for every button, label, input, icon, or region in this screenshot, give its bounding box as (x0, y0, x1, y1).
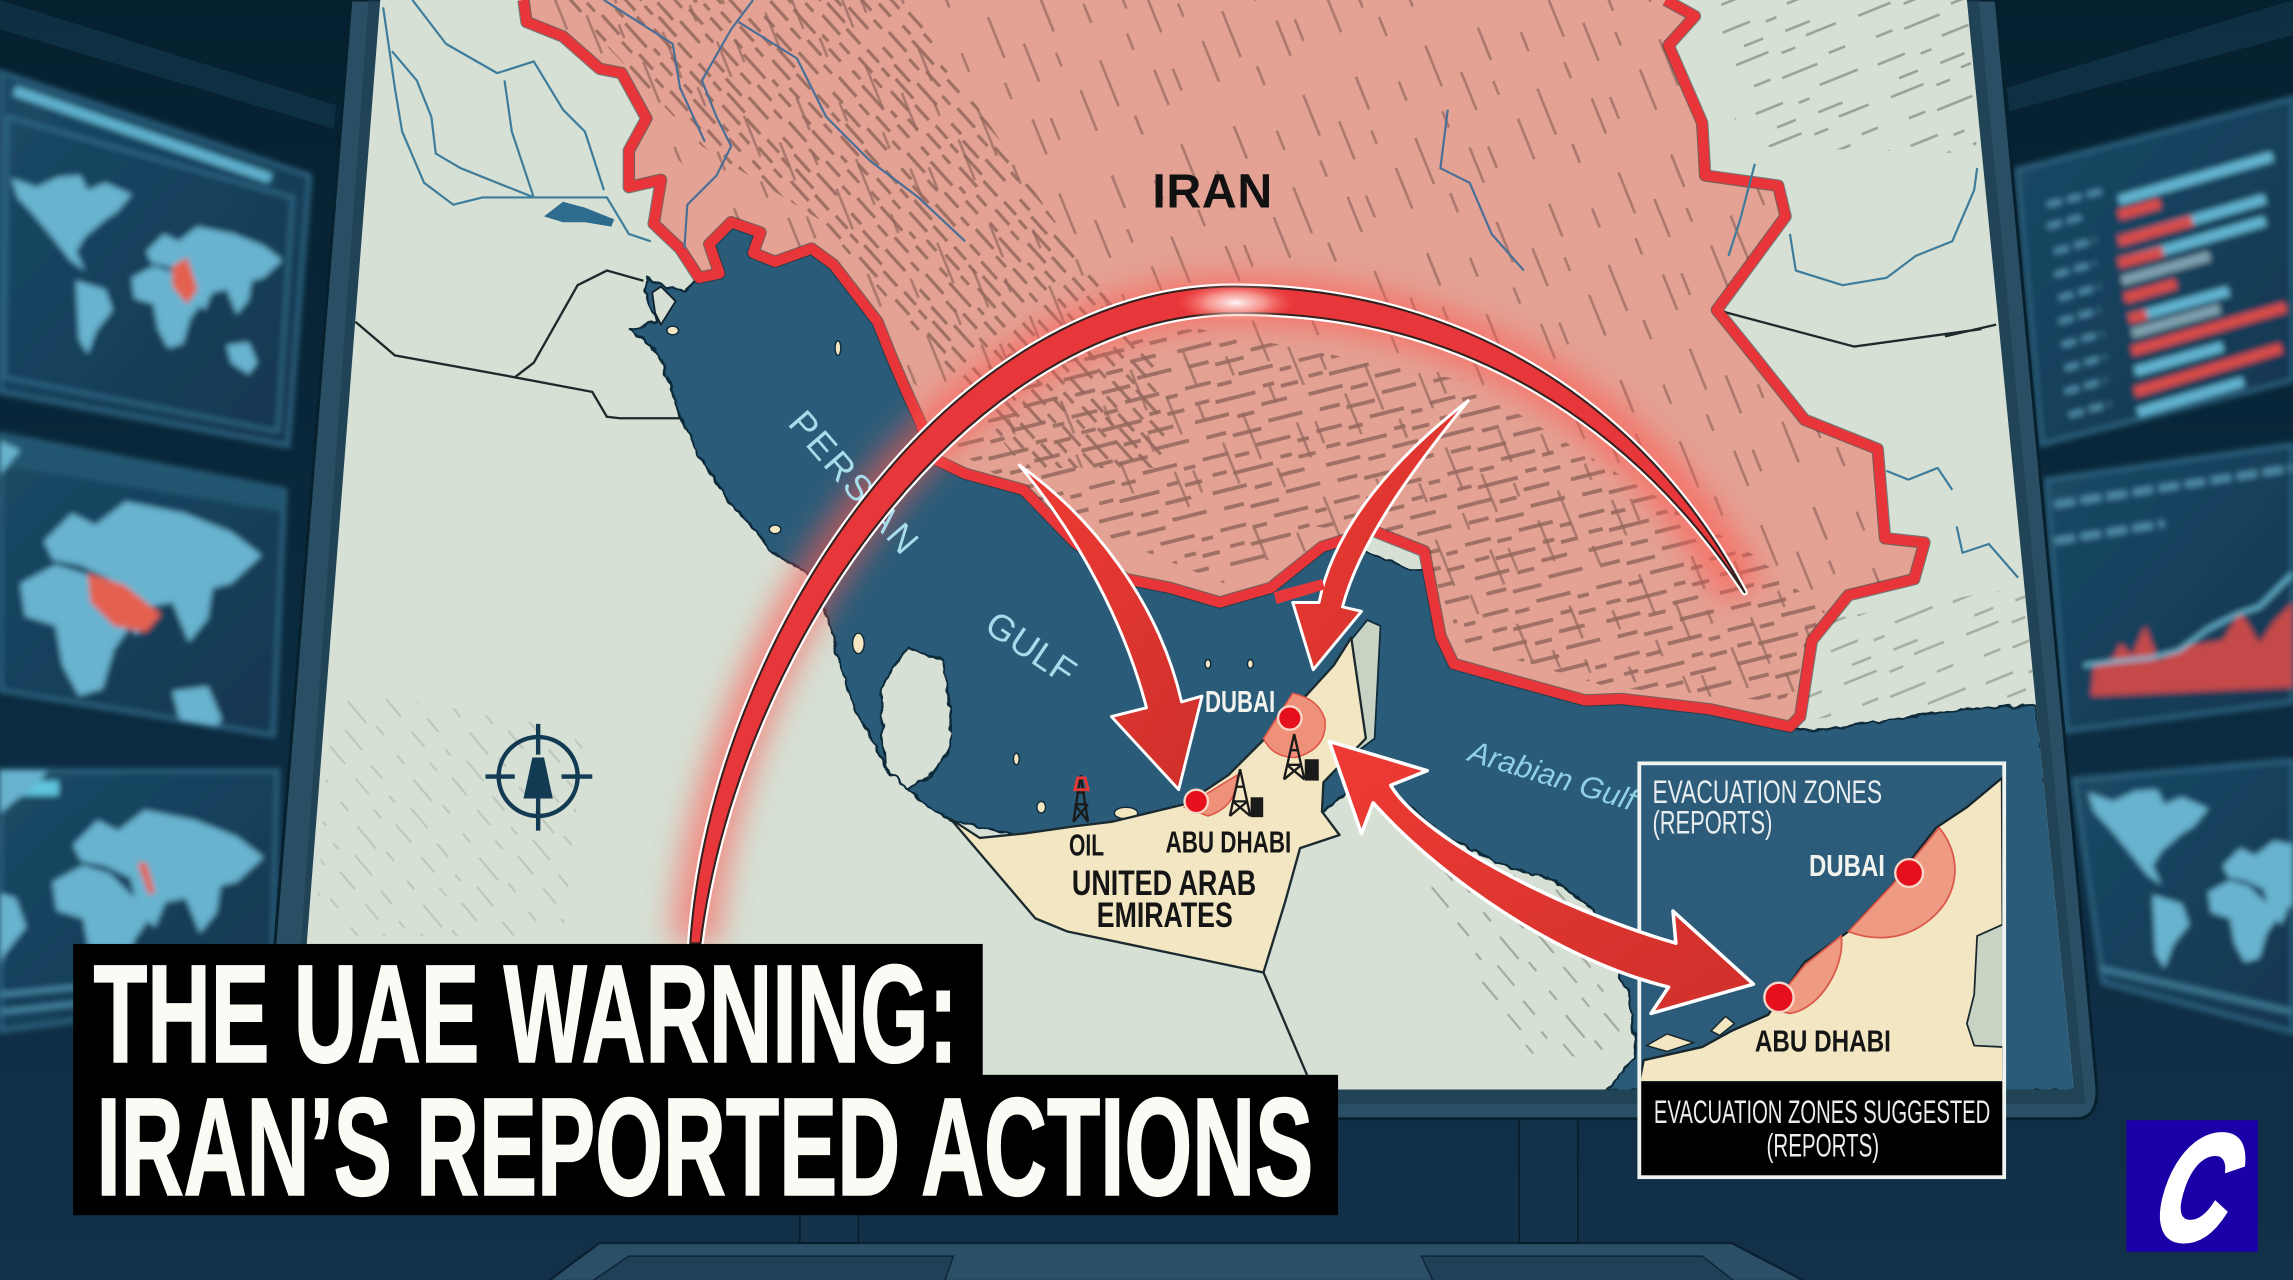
land: Qatar (880, 648, 951, 788)
inset caption: (REPORTS) (1767, 1128, 1879, 1164)
Iran border (524, 0, 1924, 727)
inset caption (1639, 1082, 2004, 1177)
label: Oil: OIL (1069, 827, 1104, 862)
icon: oil rig Dubai (1284, 734, 1318, 779)
terrain hatching: side land (314, 0, 2036, 1060)
lake (544, 202, 614, 227)
inset land (1639, 778, 2003, 1082)
icon: oil rig Abu Dhabi (1230, 769, 1262, 816)
icon: oil rig red (1073, 775, 1088, 822)
label: Iran: IRAN (1152, 165, 1272, 219)
label: United Arab Emirates: UNITED ARAB (1072, 864, 1256, 903)
right monitors (2017, 98, 2293, 1032)
inset evacuation zone: Abu Dhabi (1769, 936, 1842, 1013)
inset gray inland patch (1967, 924, 2003, 1047)
inset heading (1652, 774, 1882, 841)
Dubai evacuation zone (1263, 693, 1325, 758)
label: United Arab Emirates (1072, 864, 1256, 935)
upper wall bands (0, 0, 2293, 129)
inset evacuation zone: Dubai (1848, 828, 1955, 938)
double-headed arrow to inset (1329, 741, 1753, 1013)
small arrow stub (1274, 579, 1325, 604)
strike arrow from north-west (1019, 465, 1202, 790)
title line one: THE UAE WARNING: (94, 937, 958, 1092)
monitor: lower left world map (0, 738, 278, 1031)
attack arc (690, 287, 1745, 943)
title line two: IRAN’S REPORTED ACTIONS (97, 1070, 1313, 1225)
attack arc glow (695, 300, 1743, 943)
marker: Abu Dhabi (1185, 790, 1208, 813)
title box line two (73, 1075, 1338, 1215)
label: Dubai: DUBAI (1205, 684, 1275, 719)
terrain hatching: Iran (524, 0, 1901, 717)
label: Abu Dhabi: ABU DHABI (1166, 825, 1291, 860)
desk console (548, 1243, 1805, 1280)
marker: Dubai (1278, 706, 1302, 730)
arc flare (1177, 282, 1294, 323)
label: United Arab Emirates: EMIRATES (1097, 896, 1233, 935)
borders (355, 271, 1996, 1091)
left monitors (0, 72, 310, 1031)
land base (278, 0, 2091, 1097)
rivers (383, 0, 2018, 578)
land: Kuwait inlet (652, 287, 676, 325)
Abu Dhabi evacuation zone (1185, 775, 1237, 816)
label: Arabian Gulf: Arabian Gulf (1463, 733, 1643, 819)
inset marker: Abu Dhabi (1764, 983, 1794, 1012)
main display bezel (271, 0, 2097, 1119)
monitor: upper right bar chart (2017, 98, 2293, 445)
monitor stand (800, 1117, 1578, 1243)
Iran territory (524, 0, 1924, 727)
inset heading: EVACUATION ZONES (1652, 774, 1882, 810)
logo: C (2142, 1106, 2257, 1270)
title box line one (73, 944, 983, 1077)
inset label: Dubai: DUBAI (1809, 848, 1885, 883)
inset panel: evacuation zones (1639, 763, 2004, 1177)
islands (667, 326, 1253, 819)
inset heading: (REPORTS) (1652, 805, 1772, 841)
monitor: middle left world map (0, 420, 285, 738)
monitor: lower right world map (2074, 760, 2293, 1032)
map (278, 0, 2091, 1097)
title (73, 937, 1338, 1225)
label: Persian: PERSIAN (781, 402, 927, 562)
inset marker: Dubai (1895, 859, 1923, 887)
monitor: middle right line chart (2046, 445, 2293, 731)
inset label: Abu Dhabi: ABU DHABI (1755, 1023, 1891, 1058)
strike arrow from north-east (1293, 401, 1468, 670)
target icon (486, 724, 592, 831)
water: Persian Gulf and Arabian Gulf (629, 219, 2084, 1091)
land: Oman peninsula strip (1352, 619, 1382, 750)
land: United Arab Emirates (951, 638, 1366, 972)
label: Gulf: GULF (978, 603, 1084, 693)
inset islands (1647, 1016, 1734, 1051)
monitor: upper left world map (0, 72, 310, 446)
inset caption: EVACUATION ZONES SUGGESTED (1654, 1094, 1990, 1130)
